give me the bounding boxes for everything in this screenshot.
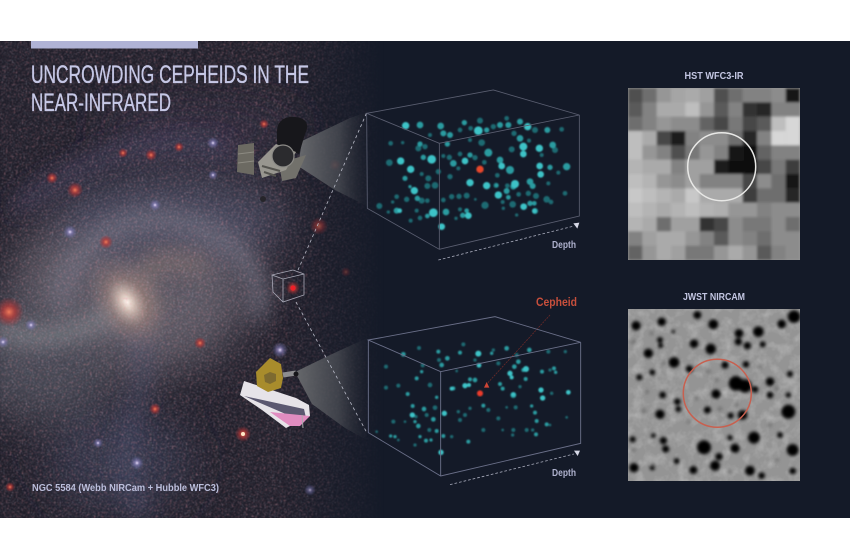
3D depth box: Webb: [368, 315, 581, 485]
title: NEAR-INFRARED: [31, 89, 171, 117]
star field: Webb: [375, 342, 571, 455]
3D depth box: Hubble: [367, 90, 579, 260]
heading: JWST NIRCAM: JWST NIRCAM: [683, 292, 745, 303]
galaxy image: NGC 5584: [0, 41, 400, 518]
Cepheid label: Cepheid: [536, 297, 577, 309]
depth label: Hubble: Depth: [552, 240, 576, 251]
light cone: Webb: [296, 342, 359, 434]
icon: Hubble Space Telescope: [237, 117, 307, 202]
Cepheid: Hubble box: [476, 166, 484, 173]
Cepheid: Webb box: [477, 390, 483, 396]
red and blue star clusters: [0, 119, 351, 496]
box wireframe: Hubble: [367, 90, 579, 249]
Cepheid leader line and pointer: [484, 315, 550, 388]
light cone: Hubble: [300, 116, 359, 201]
image caption: NGC 5584 (Webb NIRCam + Hubble WFC3): [32, 483, 219, 494]
dashed sightlines: [296, 112, 367, 433]
depth arrow: Hubble: [438, 223, 579, 260]
image panel: JWST NIRCam: [628, 309, 800, 481]
image panel: HST WFC3-IR: [628, 88, 800, 260]
depth arrow: Webb: [450, 451, 580, 485]
depth label: Webb: Depth: [552, 468, 576, 479]
icon: James Webb Space Telescope: [240, 358, 310, 428]
title bar accent: [31, 41, 198, 48]
highlight circle: JWST: [683, 359, 751, 427]
dark panel background: [284, 41, 850, 518]
title: UNCROWDING CEPHEIDS IN THE: [31, 61, 309, 89]
box wireframe: Webb: [368, 317, 581, 476]
title: [32, 65, 308, 112]
heading: HST WFC3-IR: HST WFC3-IR: [684, 71, 744, 82]
icon: Cepheid selection cube: [272, 270, 304, 302]
highlight circle: HST: [688, 133, 756, 201]
star field: Hubble: [376, 116, 570, 230]
